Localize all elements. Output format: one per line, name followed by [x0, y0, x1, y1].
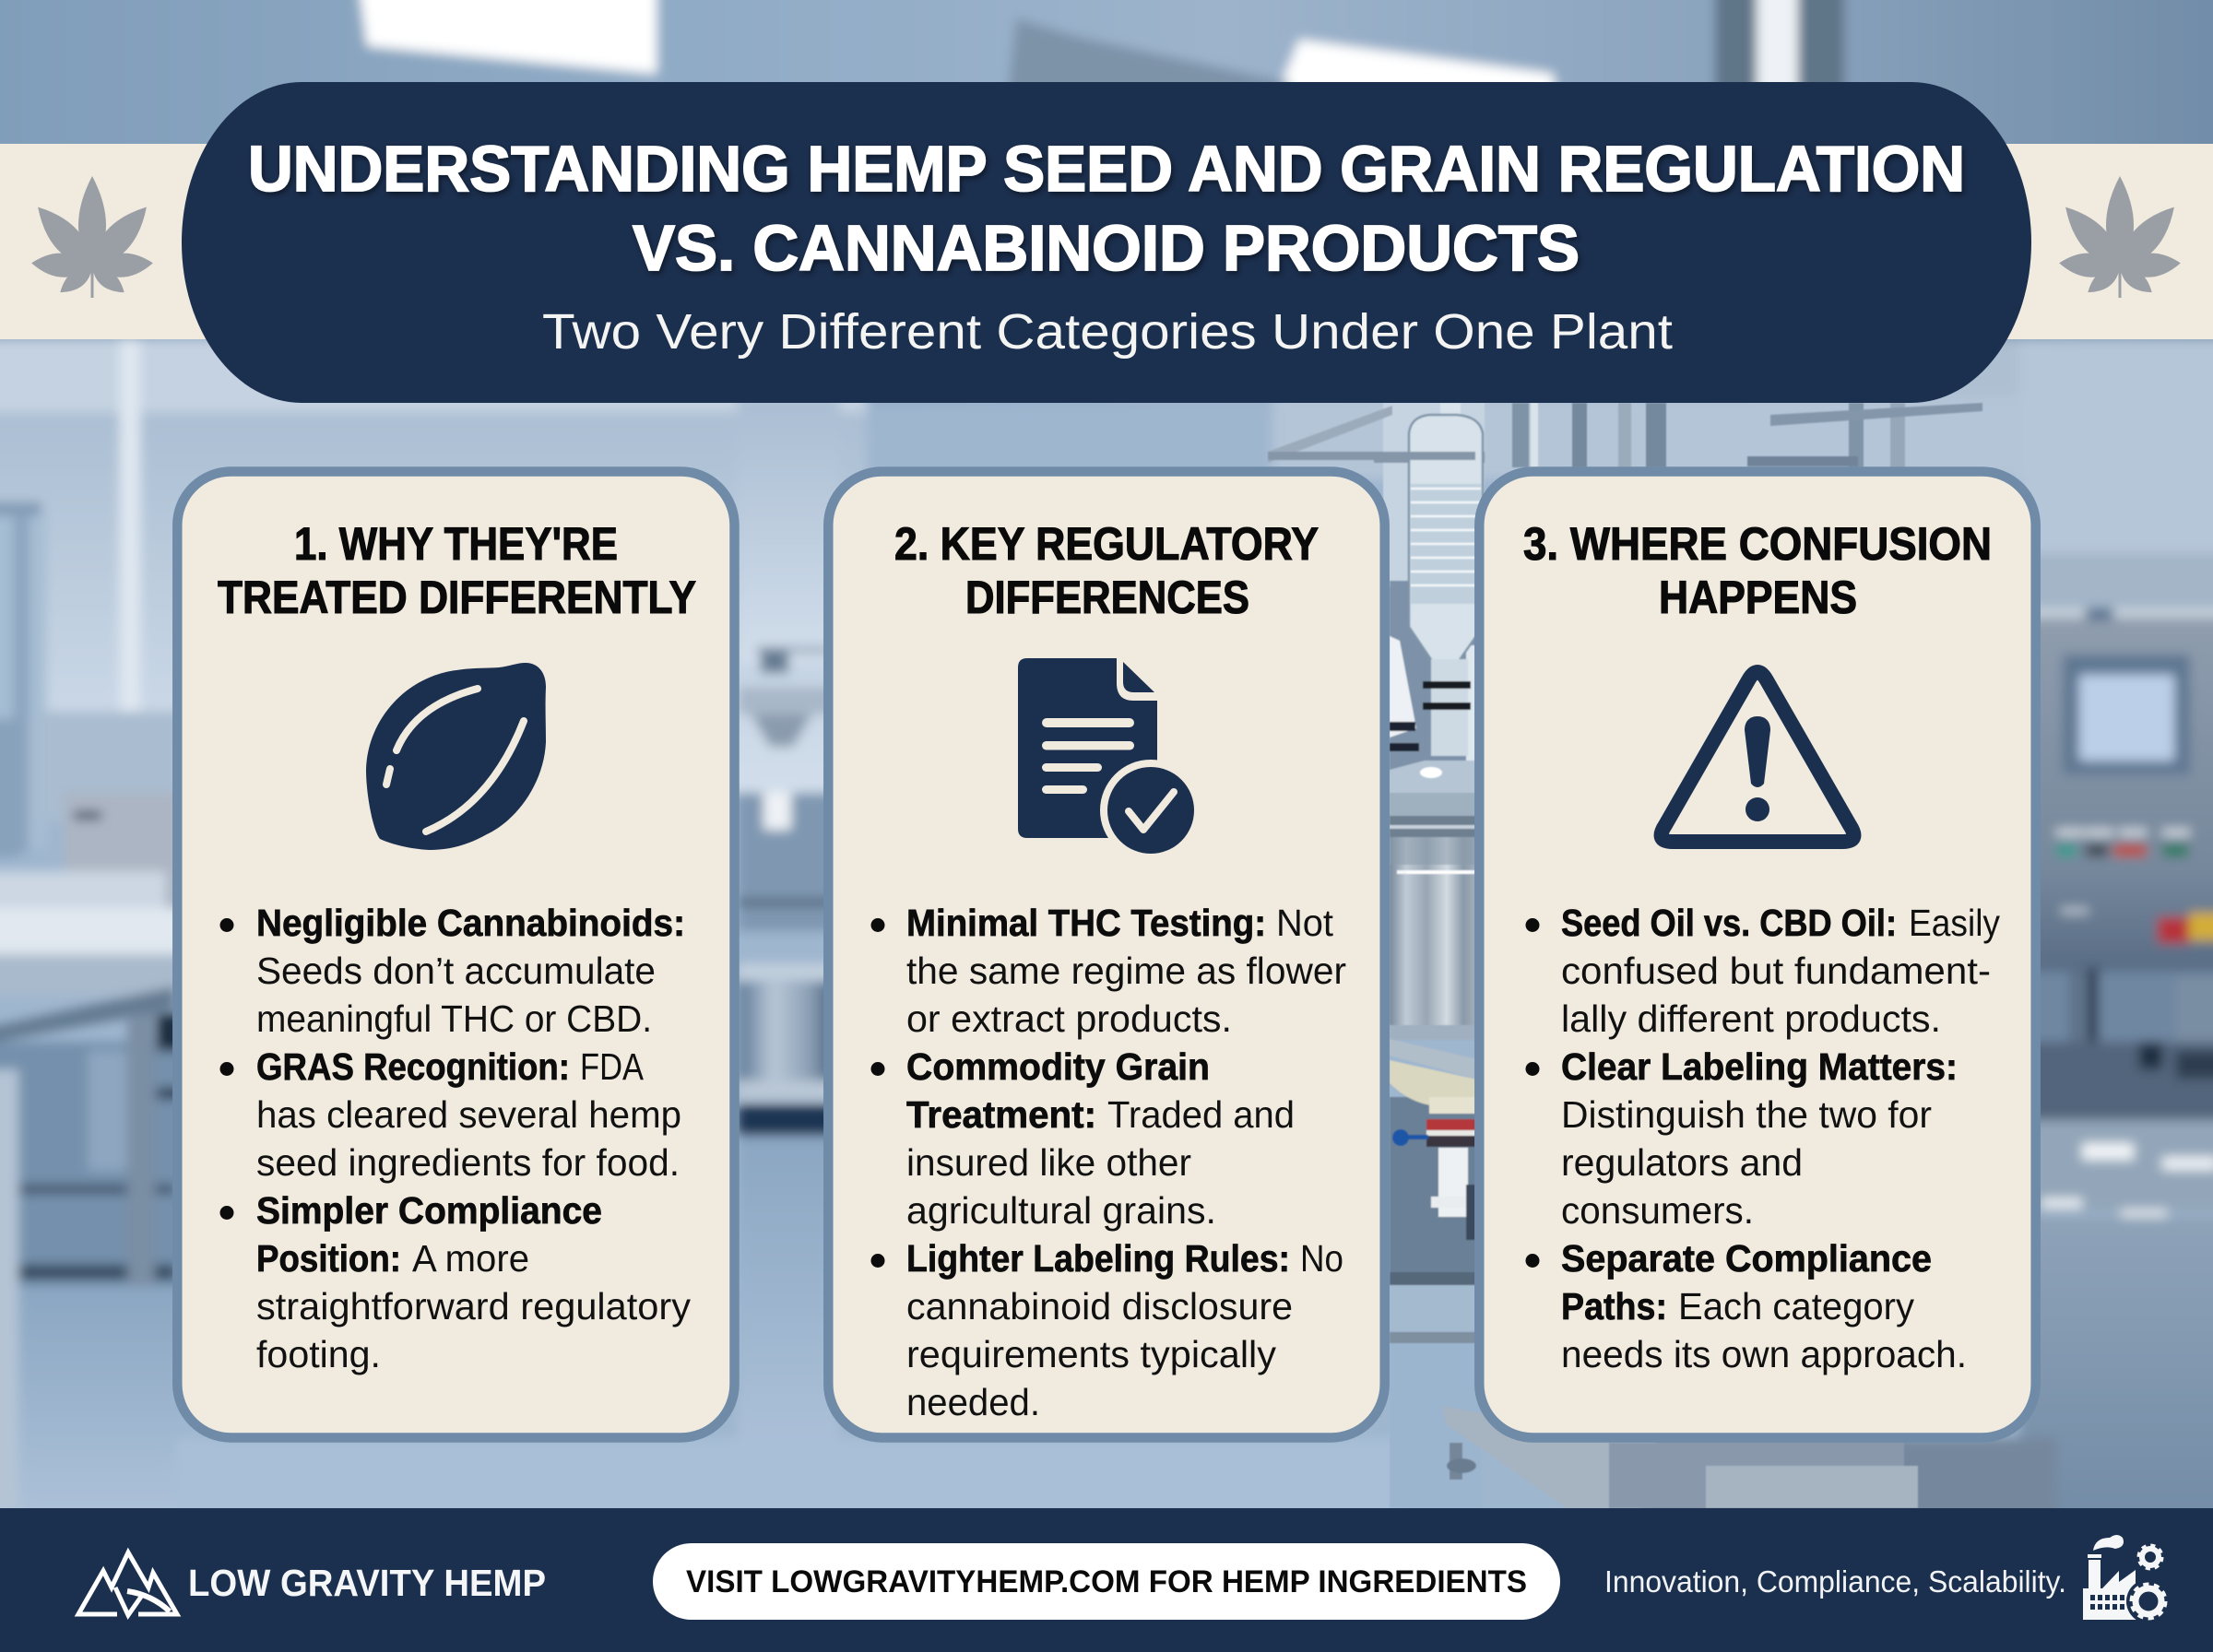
heading: card 3 [1523, 518, 1992, 623]
header band: left cream strip with leaf [0, 144, 240, 339]
tagline: Innovation, Compliance, Scalability. [1604, 1564, 2066, 1599]
list: card 2 bullets: No [1300, 1237, 1343, 1280]
list: card 1 bullets: GRAS Recognition: [256, 1045, 570, 1088]
footer bar [0, 1508, 2213, 1652]
icon: right hemp leaf [2055, 176, 2184, 299]
list: card 3 bullets: regulators and [1561, 1141, 1803, 1184]
list: card 1 bullets: FDA [580, 1045, 645, 1088]
list: card 1 bullets: Seeds don’t accumulate [256, 950, 656, 992]
list: card 2 bullets: Treatment: [906, 1093, 1096, 1136]
list: card 3 bullets: Easily [1909, 902, 2000, 944]
list: card 3 bullets: Seed Oil vs. CBD Oil: [1561, 902, 1897, 944]
call-to-action pill [653, 1543, 1560, 1620]
icon: document with check [1018, 658, 1201, 861]
brand name: LOW GRAVITY HEMP [188, 1562, 546, 1604]
heading: card 1 [218, 518, 696, 623]
list: card 2 bullets: requirements typically [906, 1333, 1276, 1375]
list: card 2 bullets: Minimal THC Testing: [906, 902, 1266, 944]
list: card 2 bullets: Lighter Labeling Rules: [906, 1237, 1290, 1280]
list: card 3 bullets: Separate Compliance [1561, 1237, 1932, 1280]
icon: left hemp leaf [28, 176, 157, 299]
list: card 2 bullets: insured like other [906, 1141, 1191, 1184]
list: card 2 bullets: needed. [906, 1381, 1040, 1423]
title: VS. CANNABINOID PRODUCTS [633, 212, 1580, 284]
list: card 1 bullets: Simpler Compliance [256, 1189, 602, 1232]
subtitle: Two Very Different Categories Under One Plant [542, 304, 1673, 360]
list: card 3 bullets: Each category [1678, 1285, 1914, 1328]
list: card 3 bullets: Paths: [1561, 1285, 1667, 1328]
panel: why they're treated differently [177, 472, 735, 1438]
list: card 3 bullets [1525, 902, 2000, 1375]
list: card 1 bullets: seed ingredients for food. [256, 1141, 680, 1184]
list: card 2 bullets: or extract products. [906, 997, 1232, 1040]
heading: card 3: 3. WHERE CONFUSION [1523, 518, 1992, 570]
list: card 2 bullets: agricultural grains. [906, 1189, 1216, 1232]
header band: right cream strip with leaf [1973, 144, 2213, 339]
icon: hemp seed [366, 663, 546, 850]
list: card 2 bullets: Traded and [1107, 1093, 1295, 1136]
heading: card 3: HAPPENS [1659, 572, 1857, 623]
list: card 3 bullets: confused but fundament- [1561, 950, 1991, 992]
icon: mountain logo [78, 1552, 177, 1615]
list: card 2 bullets: Not [1276, 902, 1334, 944]
list: card 2 bullets: the same regime as flower [906, 950, 1346, 992]
heading: card 2: 2. KEY REGULATORY [894, 518, 1319, 570]
call-to-action pill: VISIT LOWGRAVITYHEMP.COM FOR HEMP INGREDIENTS [686, 1564, 1527, 1599]
list: card 1 bullets: meaningful THC or CBD. [256, 997, 652, 1040]
heading: card 1: TREATED DIFFERENTLY [218, 572, 696, 623]
icon: factory with gears [2083, 1535, 2171, 1623]
icon: warning triangle [1662, 672, 1853, 842]
heading: card 2: DIFFERENCES [965, 572, 1249, 623]
list: card 3 bullets: needs its own approach. [1561, 1333, 1967, 1375]
background: sharp glassware and steel column [1268, 403, 1982, 1508]
panel: where confusion happens [1479, 472, 2036, 1438]
list: card 1 bullets: straightforward regulatory [256, 1285, 692, 1328]
header pill [182, 82, 2031, 403]
list: card 3 bullets: consumers. [1561, 1189, 1754, 1232]
list: card 1 bullets: has cleared several hemp [256, 1093, 681, 1136]
list: card 1 bullets: Negligible Cannabinoids: [256, 902, 685, 944]
list: card 3 bullets: Clear Labeling Matters: [1561, 1045, 1958, 1088]
list: card 2 bullets: cannabinoid disclosure [906, 1285, 1293, 1328]
list: card 2 bullets [870, 902, 1346, 1423]
list: card 1 bullets [219, 902, 692, 1375]
heading: card 1: 1. WHY THEY'RE [294, 518, 618, 570]
title [248, 133, 1965, 284]
list: card 1 bullets: Position: [256, 1237, 401, 1280]
list: card 1 bullets: A more [412, 1237, 529, 1280]
list: card 1 bullets: footing. [256, 1333, 381, 1375]
list: card 3 bullets: lally different products. [1561, 997, 1941, 1040]
title: UNDERSTANDING HEMP SEED AND GRAIN REGULATION [248, 133, 1965, 205]
list: card 3 bullets: Distinguish the two for [1561, 1093, 1932, 1136]
list: card 2 bullets: Commodity Grain [906, 1045, 1210, 1088]
heading: card 2 [894, 518, 1319, 623]
panel: key regulatory differences [828, 472, 1385, 1438]
